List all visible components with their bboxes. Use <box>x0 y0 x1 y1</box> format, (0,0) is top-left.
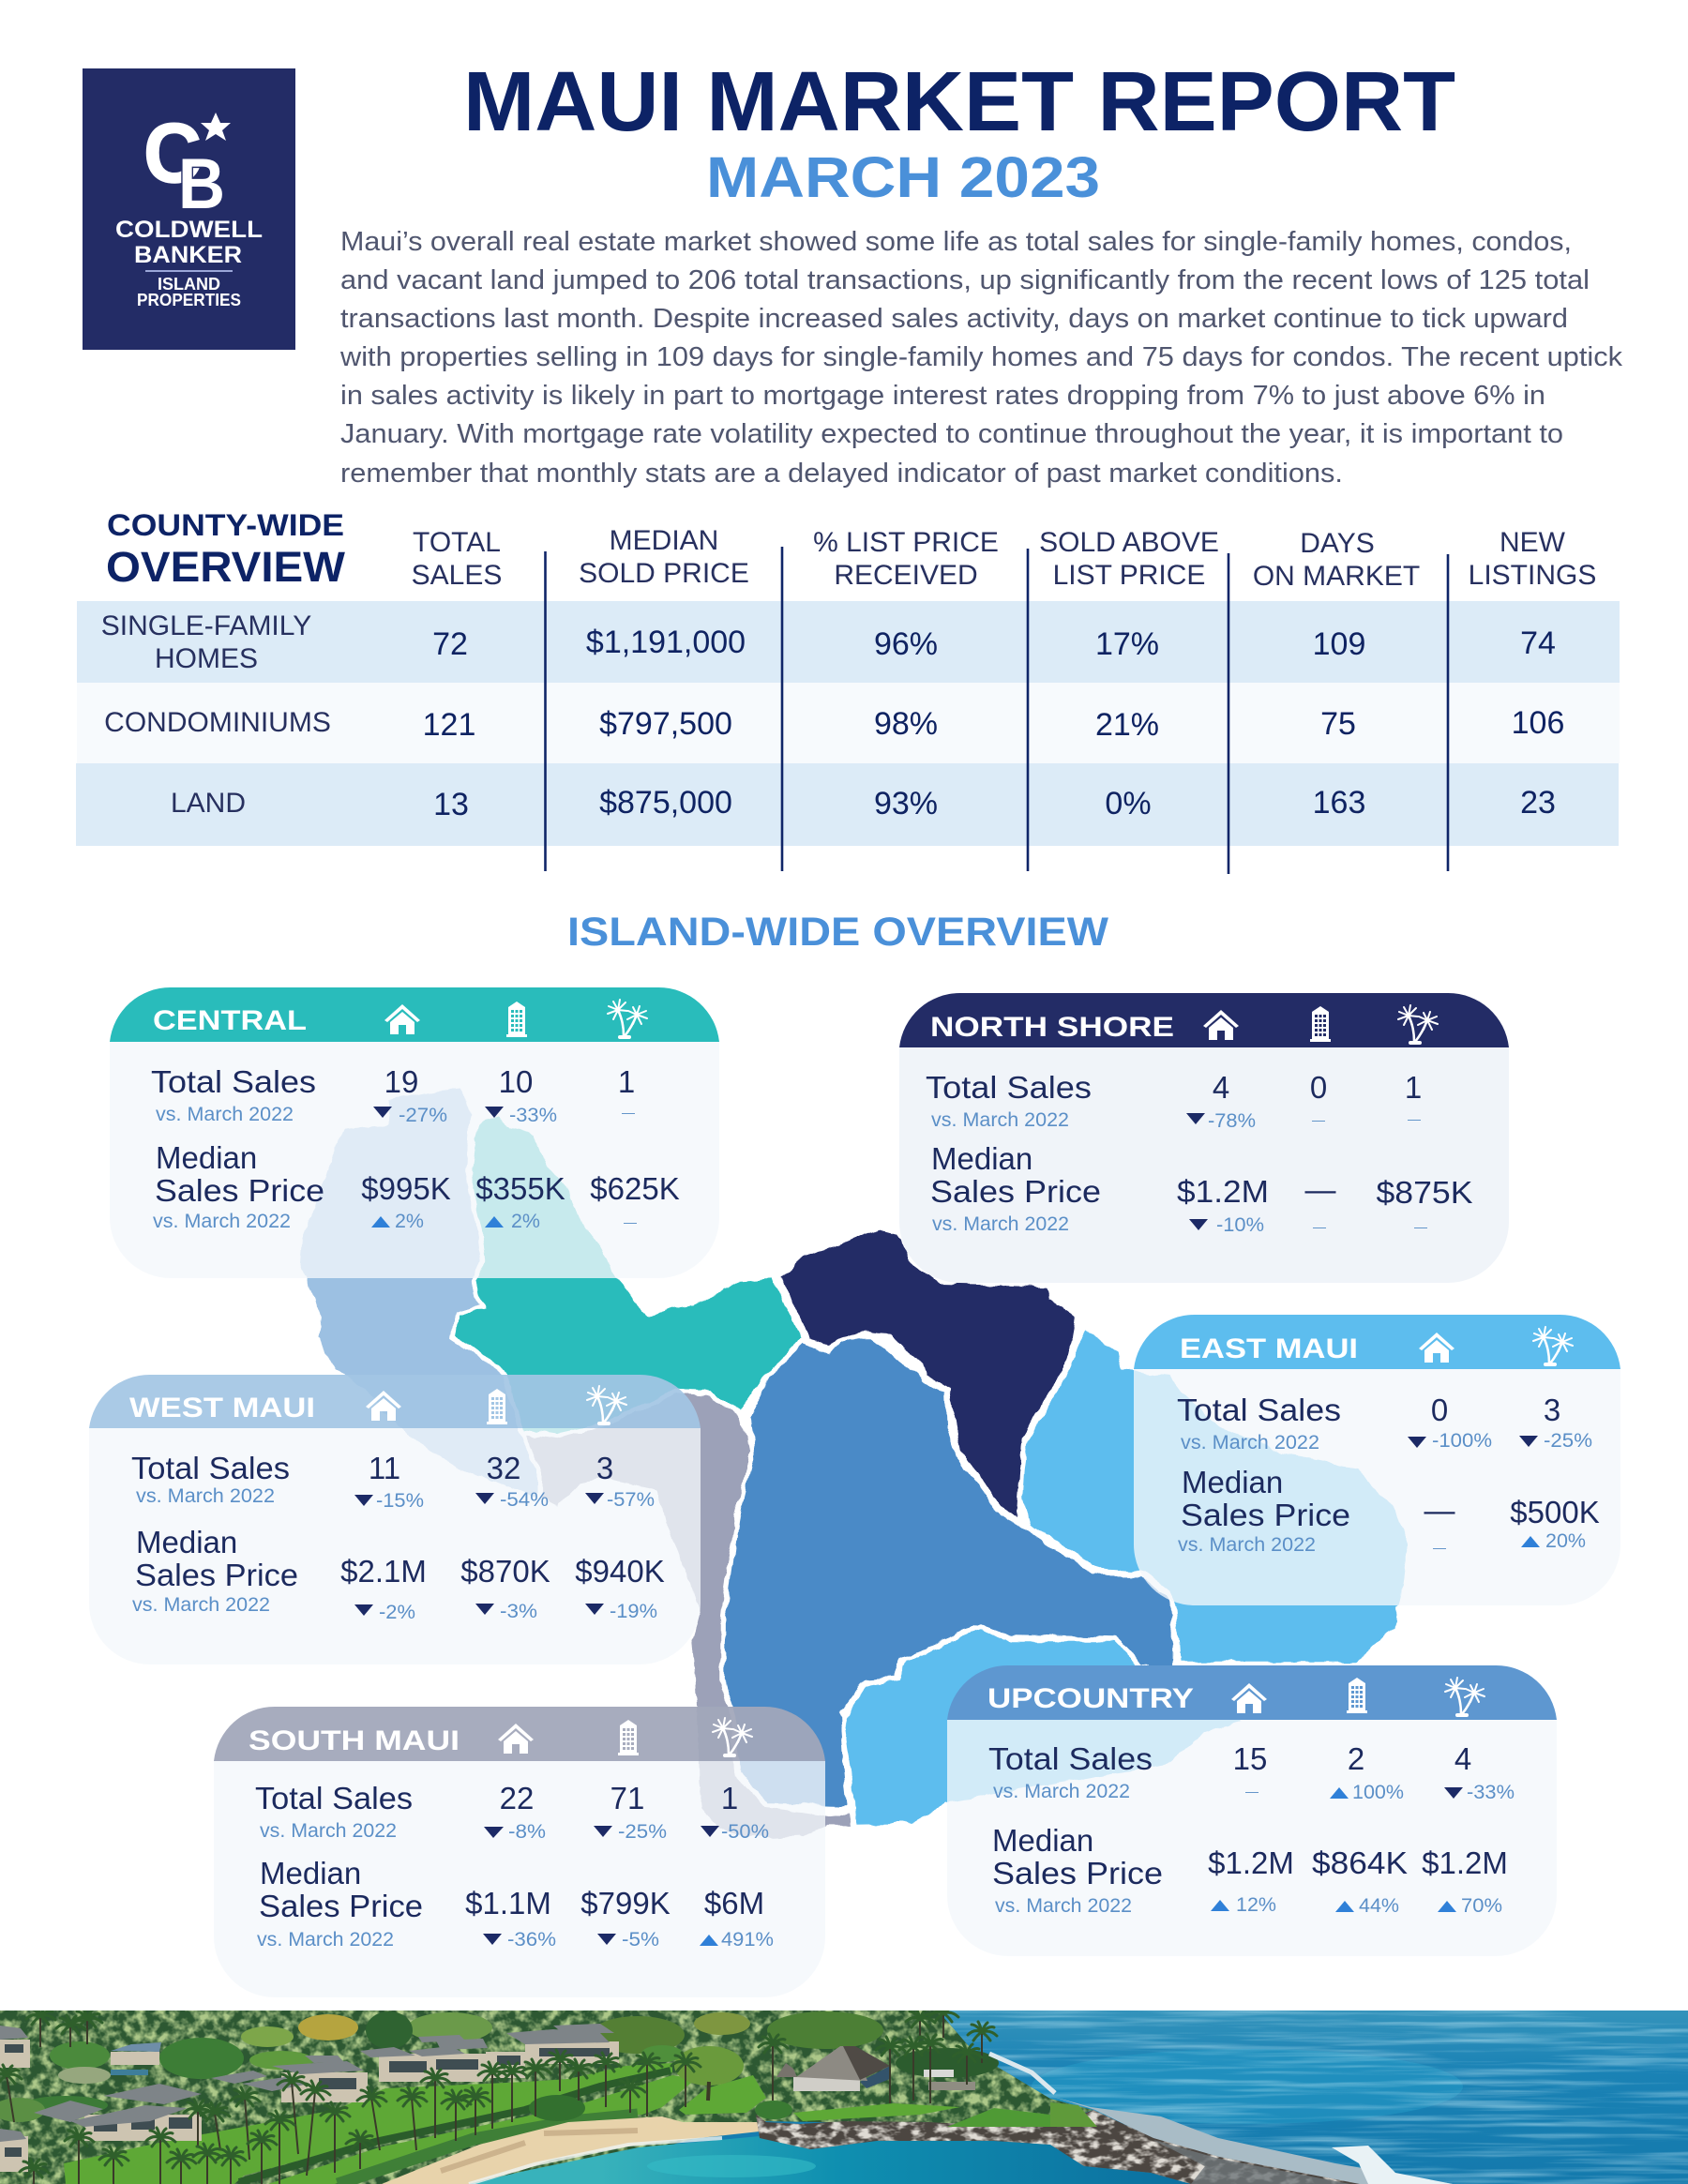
south maui stats: -25% <box>618 1821 667 1843</box>
hedges <box>239 2071 671 2182</box>
upcountry stats: 4 <box>1454 1741 1471 1776</box>
row: land: 93% <box>874 786 938 821</box>
intro paragraph: with properties selling in 109 days for single-family homes and 75 days for condos. The recent uptick <box>339 342 1623 372</box>
upcountry stats: 15 <box>1233 1741 1267 1776</box>
icon: house <box>1231 1683 1267 1713</box>
west maui stats: -19% <box>610 1601 657 1622</box>
south maui stats: -36% <box>507 1929 556 1951</box>
column headers <box>412 525 1596 592</box>
ocean <box>672 2011 1688 2184</box>
west maui stats: $2.1M <box>340 1554 427 1589</box>
central stats <box>151 1064 680 1232</box>
logo: Coldwell Banker Island Properties: PROPERTIES <box>137 291 241 309</box>
south maui stats: $6M <box>704 1886 764 1920</box>
central stats: $995K <box>361 1171 451 1206</box>
intro paragraph: in sales activity is likely in part to mortgage interest rates dropping from 7% to just above 6% in <box>340 381 1545 411</box>
south maui stats: 22 <box>500 1781 534 1815</box>
west maui stats: vs. March 2022 <box>132 1594 270 1616</box>
west maui stats: -2% <box>379 1602 415 1623</box>
icon: house <box>1419 1333 1454 1363</box>
logo: Coldwell Banker Island Properties <box>83 68 295 350</box>
icon: house <box>366 1391 401 1421</box>
east maui stats: Sales Price <box>1181 1498 1350 1532</box>
panel: south maui: SOUTH MAUI <box>249 1725 460 1756</box>
panel: east maui: EAST MAUI <box>1180 1333 1358 1364</box>
north shore stats: -10% <box>1216 1214 1264 1236</box>
row: land: LAND <box>171 788 246 819</box>
upcountry stats: 44% <box>1359 1895 1399 1917</box>
east maui stats: Median <box>1182 1465 1283 1499</box>
central stats: vs. March 2022 <box>156 1104 294 1125</box>
central stats: 2% <box>511 1211 540 1232</box>
west maui stats: -57% <box>607 1489 655 1511</box>
north shore stats <box>926 1070 1472 1236</box>
island map <box>298 1086 1410 1841</box>
intro paragraph: remember that monthly stats are a delayed indicator of past market conditions. <box>340 459 1343 489</box>
logo: Coldwell Banker Island Properties: BANKER <box>134 242 242 268</box>
north shore stats: Sales Price <box>930 1174 1101 1209</box>
row: land: 163 <box>1313 785 1365 821</box>
east maui stats: -25% <box>1544 1430 1592 1452</box>
panel: south maui <box>214 1707 825 1997</box>
central stats: -27% <box>399 1105 447 1126</box>
south maui stats: $1.1M <box>465 1886 551 1920</box>
upcountry stats: — <box>1245 1784 1258 1799</box>
east maui stats: 3 <box>1544 1393 1560 1427</box>
south maui stats: 71 <box>610 1781 644 1815</box>
central stats: vs. March 2022 <box>153 1211 291 1232</box>
central stats: Median <box>156 1140 257 1175</box>
row: single-family homes <box>101 610 1556 674</box>
upcountry stats: $1.2M <box>1422 1845 1508 1880</box>
central stats: — <box>622 1105 635 1120</box>
west maui stats: Total Sales <box>131 1451 290 1485</box>
north shore stats: — <box>1305 1172 1335 1207</box>
central stats: Total Sales <box>151 1064 316 1099</box>
east maui stats: $500K <box>1510 1495 1600 1529</box>
east maui stats: vs. March 2022 <box>1178 1534 1316 1556</box>
county-wide overview table <box>76 508 1620 874</box>
north shore stats: — <box>1414 1219 1427 1234</box>
west maui stats: Median <box>136 1525 237 1559</box>
surf and rock shelf <box>1050 2096 1453 2184</box>
upcountry stats: vs. March 2022 <box>995 1895 1132 1917</box>
south maui stats: vs. March 2022 <box>260 1820 397 1842</box>
table row backgrounds <box>76 601 1620 846</box>
upcountry stats: 100% <box>1352 1782 1404 1803</box>
north shore stats: -78% <box>1208 1110 1256 1132</box>
east maui stats: Total Sales <box>1177 1393 1341 1427</box>
row: land: $875,000 <box>599 785 732 821</box>
central stats: 1 <box>618 1064 635 1099</box>
table heading: OVERVIEW <box>106 543 346 591</box>
panel: north shore: NORTH SHORE <box>930 1012 1174 1043</box>
upcountry stats <box>988 1741 1515 1917</box>
north shore stats: — <box>1312 1112 1325 1127</box>
north shore stats: vs. March 2022 <box>932 1213 1069 1235</box>
central stats: 10 <box>499 1064 533 1099</box>
west maui stats: $940K <box>575 1554 665 1589</box>
map region: north shore <box>778 1228 1078 1520</box>
panel: west maui: WEST MAUI <box>129 1393 315 1423</box>
central stats: -33% <box>509 1105 557 1126</box>
icon: palms <box>1398 1005 1438 1043</box>
intro paragraph: transactions last month. Despite increased sales activity, days on market continue to tick upward <box>340 304 1568 334</box>
row: single-family homes: 109 <box>1313 626 1365 662</box>
row: single-family homes: SINGLE-FAMILY <box>101 610 311 641</box>
south maui stats <box>255 1781 774 1951</box>
north shore stats: Total Sales <box>926 1070 1092 1105</box>
table column dividers <box>546 547 1448 874</box>
palm trees <box>0 2003 997 2184</box>
icon: condo building <box>618 1720 639 1755</box>
south maui stats: -8% <box>508 1821 546 1843</box>
south maui stats: -50% <box>721 1821 769 1843</box>
upcountry stats: Total Sales <box>988 1741 1153 1776</box>
icon: condo building <box>506 1002 527 1037</box>
column headers: SOLD PRICE <box>579 558 749 589</box>
panel: central: CENTRAL <box>153 1005 307 1036</box>
icon: palms <box>1533 1327 1573 1364</box>
column headers: NEW <box>1500 527 1566 558</box>
east maui stats: — <box>1433 1540 1446 1555</box>
column headers: MEDIAN <box>610 525 718 556</box>
south maui stats: Total Sales <box>255 1781 413 1815</box>
map region: west maui <box>298 1086 539 1500</box>
big trees <box>529 2045 792 2121</box>
row: single-family homes: $1,191,000 <box>586 625 746 660</box>
east maui stats: vs. March 2022 <box>1181 1432 1319 1453</box>
column headers: SOLD ABOVE <box>1039 527 1219 558</box>
icon: palms <box>1445 1678 1485 1715</box>
row: land: 23 <box>1520 785 1556 821</box>
panel: upcountry <box>947 1665 1557 1956</box>
upcountry stats: Median <box>992 1823 1093 1858</box>
central stats: $355K <box>475 1171 565 1206</box>
north shore stats: 4 <box>1213 1070 1229 1105</box>
north shore stats: 1 <box>1405 1070 1422 1105</box>
central stats: 19 <box>384 1064 418 1099</box>
column headers: % LIST PRICE <box>813 527 999 558</box>
map region: east maui <box>1017 1327 1410 1664</box>
lawn <box>64 2063 960 2184</box>
west maui stats: vs. March 2022 <box>136 1485 275 1507</box>
icon: condo building <box>1310 1006 1331 1042</box>
east maui stats: -100% <box>1432 1430 1492 1452</box>
north shore stats: Median <box>931 1141 1032 1176</box>
row: condominiums <box>104 705 1564 743</box>
icon: house <box>498 1724 534 1754</box>
table heading <box>106 508 346 591</box>
subtitle: MARCH 2023 <box>706 145 1100 209</box>
logo: Coldwell Banker Island Properties: ISLAND <box>158 275 220 294</box>
east maui stats: — <box>1424 1493 1455 1528</box>
south maui stats: vs. March 2022 <box>257 1929 394 1951</box>
column headers: SALES <box>412 560 502 591</box>
logo mark: letters and star: B <box>178 144 225 224</box>
central stats: $625K <box>590 1171 680 1206</box>
column headers: LISTINGS <box>1469 560 1596 591</box>
intro paragraph: Maui’s overall real estate market showed some life as total sales for single-family homes, condos, <box>340 227 1572 257</box>
west maui stats: $870K <box>460 1554 550 1589</box>
upcountry stats: 70% <box>1461 1895 1502 1917</box>
central stats: Sales Price <box>155 1173 324 1208</box>
intro paragraph <box>339 227 1623 489</box>
map region: south maui <box>520 1393 853 1841</box>
logo mark: letters and star: C <box>143 107 202 201</box>
map region: upcountry south <box>842 1627 1247 1827</box>
column headers: ON MARKET <box>1253 561 1420 592</box>
row: single-family homes: HOMES <box>155 643 258 674</box>
upcountry stats: $1.2M <box>1208 1845 1294 1880</box>
south maui stats: Sales Price <box>259 1889 423 1923</box>
icon: palms <box>608 1000 647 1037</box>
row: condominiums: $797,500 <box>599 706 732 742</box>
north shore stats: — <box>1408 1111 1421 1126</box>
row: condominiums: 121 <box>423 707 475 743</box>
icon: palms <box>587 1386 626 1423</box>
lagoon <box>469 2136 1191 2184</box>
column headers: TOTAL <box>413 527 501 558</box>
beach <box>382 2116 763 2184</box>
row: land: 0% <box>1105 786 1152 821</box>
west maui stats: -15% <box>376 1490 424 1512</box>
icon: house <box>1203 1010 1239 1040</box>
row: condominiums: 106 <box>1512 705 1564 741</box>
west maui stats: 32 <box>487 1451 520 1485</box>
upcountry stats: $864K <box>1312 1845 1408 1880</box>
foliage clumps <box>0 2011 999 2122</box>
icon: house <box>384 1004 420 1034</box>
west maui stats: 3 <box>596 1451 613 1485</box>
north shore stats: $1.2M <box>1177 1174 1269 1209</box>
south maui stats: 491% <box>721 1929 774 1951</box>
column headers: RECEIVED <box>834 560 978 591</box>
table heading: COUNTY-WIDE <box>107 508 344 542</box>
icon: condo building <box>1347 1678 1367 1713</box>
west maui stats: Sales Price <box>135 1558 298 1592</box>
resort buildings <box>0 2040 619 2172</box>
row: single-family homes: 72 <box>432 626 468 662</box>
north shore stats: $875K <box>1377 1175 1472 1210</box>
east maui stats: 20% <box>1545 1530 1586 1552</box>
row: single-family homes: 96% <box>874 626 938 662</box>
row: condominiums: CONDOMINIUMS <box>104 707 331 738</box>
row: condominiums: 98% <box>874 706 938 742</box>
upcountry stats: -33% <box>1467 1782 1515 1803</box>
west maui stats: -54% <box>500 1489 549 1511</box>
map region: upcountry <box>722 1336 1175 1808</box>
icon: condo building <box>487 1389 507 1424</box>
row: land <box>171 785 1556 822</box>
panel: upcountry: UPCOUNTRY <box>987 1683 1194 1714</box>
north shore stats: 0 <box>1310 1070 1327 1105</box>
icon: palms <box>713 1718 752 1755</box>
east maui stats: 0 <box>1431 1393 1448 1427</box>
panel: central <box>110 987 719 1278</box>
logo: Coldwell Banker Island Properties: COLDWELL <box>115 217 263 243</box>
row: single-family homes: 74 <box>1520 625 1556 661</box>
south maui stats: $799K <box>580 1886 671 1920</box>
logo mark: letters and star <box>143 107 231 224</box>
column headers: DAYS <box>1300 528 1375 559</box>
row: condominiums: 21% <box>1095 707 1159 743</box>
south maui stats: Median <box>260 1856 361 1890</box>
building roofs <box>0 2024 614 2142</box>
panel: north shore <box>899 993 1509 1283</box>
upcountry stats: Sales Price <box>992 1856 1163 1890</box>
intro paragraph: and vacant land jumped to 206 total transactions, up significantly from the recent lows of 125 total <box>340 265 1590 295</box>
map region: central <box>453 1113 803 1436</box>
west maui stats: -3% <box>500 1601 537 1622</box>
panel: west maui <box>89 1375 701 1664</box>
west maui stats <box>131 1451 665 1623</box>
land <box>0 2011 1093 2184</box>
south maui stats: 1 <box>721 1781 738 1815</box>
north shore stats: vs. March 2022 <box>931 1109 1069 1131</box>
section heading: island-wide overview: ISLAND-WIDE OVERVIEW <box>567 910 1108 955</box>
central stats: 2% <box>395 1211 424 1232</box>
row: single-family homes: 17% <box>1095 626 1159 662</box>
building windows <box>5 2044 610 2157</box>
upcountry stats: vs. March 2022 <box>993 1781 1130 1802</box>
panel: east maui <box>1134 1315 1620 1605</box>
south maui stats: -5% <box>622 1929 659 1951</box>
oceanfront hale <box>776 2046 975 2091</box>
row: condominiums: 75 <box>1320 706 1356 742</box>
upcountry stats: 12% <box>1236 1894 1276 1916</box>
intro paragraph: January. With mortgage rate volatility expected to continue throughout the year, it is important to <box>340 419 1563 449</box>
upcountry stats: 2 <box>1348 1741 1364 1776</box>
west maui stats: 11 <box>369 1451 400 1485</box>
east maui stats <box>1177 1393 1600 1556</box>
north shore stats: — <box>1313 1219 1326 1234</box>
footer photo: aerial coastline illustration <box>0 2003 1688 2184</box>
title: MAUI MARKET REPORT <box>463 55 1455 149</box>
column headers: LIST PRICE <box>1053 560 1205 591</box>
row: land: 13 <box>433 787 469 822</box>
central stats: — <box>624 1214 637 1229</box>
